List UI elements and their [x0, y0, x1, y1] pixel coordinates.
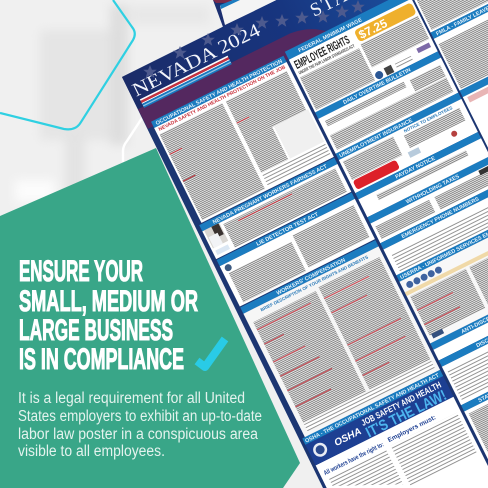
body text: visible to all employees. [18, 443, 165, 460]
panel: OSHA job safety and health: Employers must: [387, 414, 437, 444]
panel: occupational safety [151, 56, 334, 223]
panel: workers compensation: BRIEF DESCRIPTION OF YOUR RIGHTS AND BENEFITS [260, 254, 369, 312]
body text: It is a legal requirement for all United [18, 390, 245, 407]
icon: check mark [197, 339, 225, 367]
panel: withholding taxes: WITHHOLDING TAXES [405, 174, 461, 205]
wage badge: $7.25 [356, 16, 390, 42]
rear poster blue band [220, 0, 240, 9]
red white stripe [140, 56, 232, 108]
panel: federal minimum wage and employee rights [285, 0, 438, 113]
panel: unemployment insurance: UNEMPLOYMENT INSURANCE [339, 118, 414, 159]
photo [204, 223, 228, 248]
body text [18, 390, 262, 460]
banner title: NEVADA 2024 [129, 20, 264, 101]
panel: state of Nevada [461, 344, 488, 465]
panel: OSHA job safety and health: IT'S THE LAW! [363, 387, 449, 441]
wage badge [354, 2, 417, 43]
red callout [353, 160, 400, 190]
column 3 [409, 0, 488, 151]
panel: emergency phone numbers: EMERGENCY PHONE NUMBERS [401, 196, 480, 240]
panel: OSHA job safety and health: All workers have the right to: [323, 441, 385, 477]
main heading: ENSURE YOUR [19, 255, 143, 288]
main heading: SMALL, MEDIUM OR [19, 285, 198, 318]
body text: labor law poster in a conspicuous area [18, 426, 258, 443]
panel: daily overtime bulletin [315, 51, 458, 154]
panel: federal minimum wage and employee rights: EMPLOYEE RIGHTS [292, 33, 352, 72]
OSHA lower white sheet [316, 397, 488, 488]
panel: pregnant workers fairness act [199, 158, 351, 259]
decorative outline: teal rounded square [0, 0, 135, 129]
panel: lie detector test act [217, 193, 375, 307]
maroon wave [138, 18, 331, 129]
panel: occupational safety: NEVADA SAFETY AND HEALTH PROTECTION ON THE JOB [158, 64, 287, 133]
panel: daily overtime bulletin: DAILY OVERTIME BULLETIN [342, 67, 412, 106]
decorative outline: white rounded line [123, 118, 142, 162]
panel: unemployment insurance: NOTICE TO EMPLOYEES [403, 105, 453, 134]
panel: lie detector test act: LIE DETECTOR TEST ACT [256, 211, 320, 248]
panel: federal minimum wage and employee rights: UNDER THE FAIR LABOR STANDARDS ACT [298, 43, 356, 75]
panel: OSHA job safety and health [302, 370, 460, 479]
panel: pregnant workers fairness act: NEVADA PREGNANT WORKERS FAIRNESS ACT [212, 164, 329, 226]
panel: OSHA job safety and health: OSHA - THE OCCUPATIONAL SAFETY AND HEALTH ACT [304, 372, 441, 445]
green panel [0, 148, 300, 488]
agency seals [405, 265, 443, 289]
panel: federal minimum wage and employee rights: FEDERAL MINIMUM WAGE [298, 17, 364, 54]
body text: States employers to exhibit an up-to-date [18, 408, 262, 425]
banner stars [143, 0, 365, 78]
panel: workers compensation [240, 240, 440, 437]
panel: unemployment insurance [336, 93, 478, 193]
panel: OSHA job safety and health: JOB SAFETY AND HEALTH [360, 380, 443, 428]
panel: workers compensation: WORKERS' COMPENSATION [276, 257, 347, 297]
main poster: Nevada 2024 [122, 0, 488, 488]
panel: payday notice [355, 132, 488, 217]
panel: occupational safety: OCCUPATIONAL SAFETY AND HEALTH PROTECTION [155, 59, 284, 127]
panel: state notices [409, 0, 488, 33]
rear poster [213, 0, 280, 27]
column 2 [285, 0, 488, 465]
rear poster red wave [213, 0, 280, 3]
panel: emergency phone numbers [380, 182, 488, 275]
red subheads [257, 270, 416, 409]
main heading: IS IN COMPLIANCE [19, 343, 184, 376]
main heading: LARGE BUSINESS [19, 314, 173, 347]
main heading [19, 255, 198, 376]
panel: uniformed services employment [396, 214, 488, 343]
panel: withholding taxes [367, 156, 488, 243]
poster banner [122, 0, 452, 129]
panel: payday notice: PAYDAY NOTICE [395, 156, 437, 181]
panel: lower notice [460, 2, 488, 151]
panel: OSHA job safety and health: OSHA [333, 426, 363, 449]
panel: anti discrimination [430, 282, 488, 360]
poster base [122, 0, 488, 488]
panel: FMLA family leave [431, 0, 488, 91]
rear poster white panel [220, 0, 277, 25]
column 1 [146, 56, 460, 479]
panel: discrimination [439, 299, 488, 405]
